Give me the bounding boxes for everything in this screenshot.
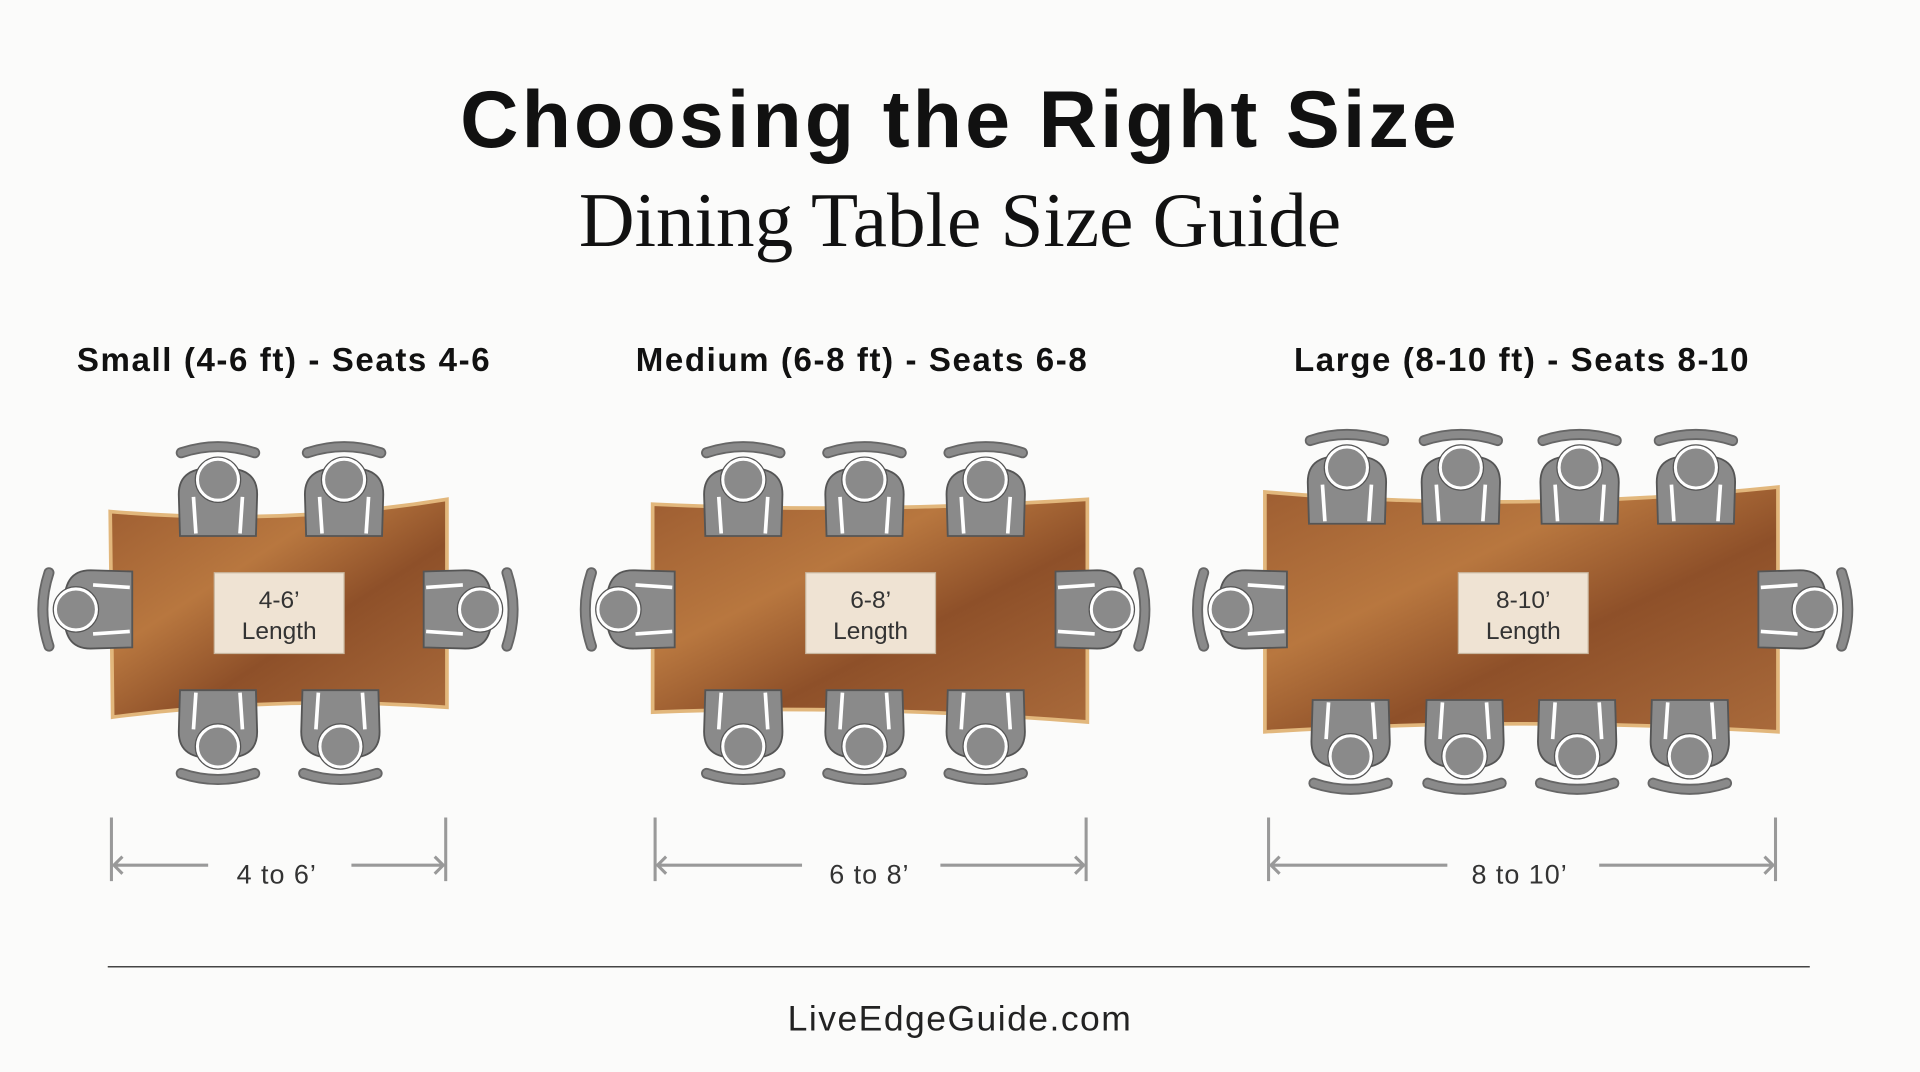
footer: LiveEdgeGuide.com [788, 998, 1132, 1038]
panel: large table [1198, 434, 1848, 789]
dimension: small: 4 to 6’ [237, 860, 317, 890]
title: Choosing the Right Size [460, 75, 1460, 165]
heading: small: Small (4-6 ft) - Seats 4-6 [77, 342, 491, 379]
panel: medium table [585, 447, 1145, 780]
panel: small table [43, 447, 513, 780]
panel: small table: 4-6’ [259, 587, 300, 614]
dimension: large: 8 to 10’ [1471, 860, 1568, 890]
dimension: medium [655, 817, 1086, 890]
dimension: small [111, 817, 446, 890]
heading: large: Large (8-10 ft) - Seats 8-10 [1294, 342, 1750, 379]
subtitle: Dining Table Size Guide [579, 177, 1341, 263]
dimension: large [1269, 817, 1776, 890]
panel: large table: Length [1486, 618, 1561, 645]
panel: medium table: 6-8’ [850, 587, 891, 614]
dimension: medium: 6 to 8’ [829, 860, 910, 890]
panel: large table: 8-10’ [1496, 587, 1550, 614]
panel: medium table: Length [833, 618, 908, 645]
panel: small table: Length [242, 618, 317, 645]
heading: medium: Medium (6-8 ft) - Seats 6-8 [636, 342, 1088, 379]
